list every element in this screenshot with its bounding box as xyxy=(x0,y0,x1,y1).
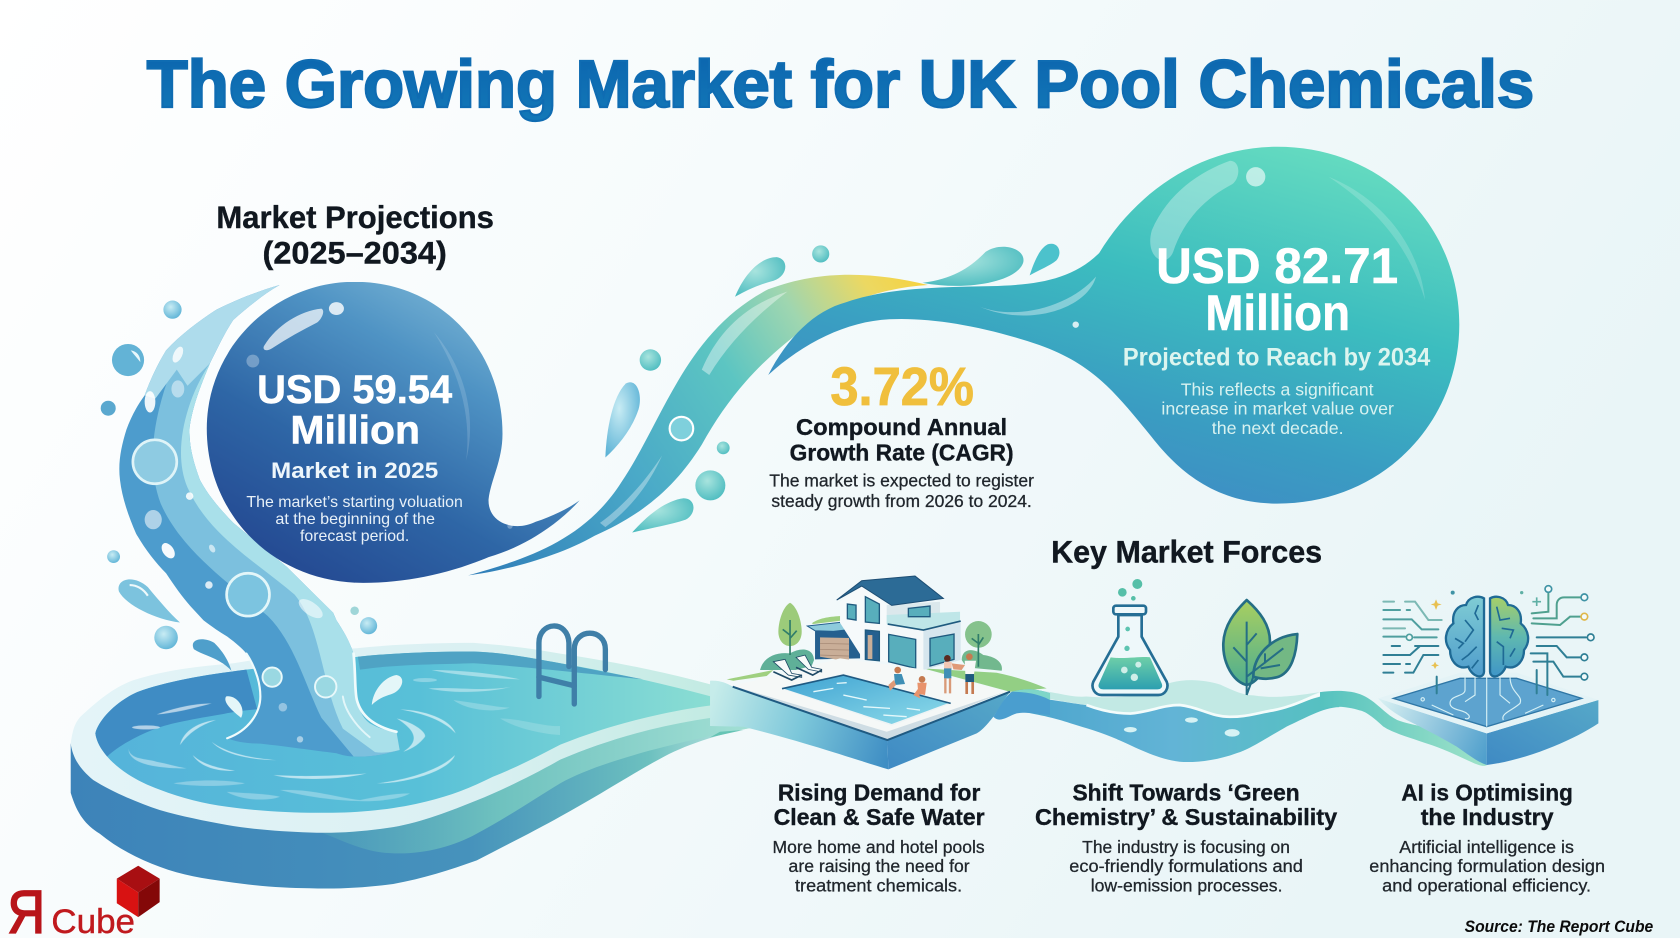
lawn xyxy=(923,668,1047,692)
heading: market projections xyxy=(216,200,494,271)
garage xyxy=(815,628,860,659)
force: rising demand: treatment chemicals. xyxy=(795,875,962,895)
trees xyxy=(778,603,992,667)
chip platform xyxy=(1378,698,1487,765)
logo: RCube: Я xyxy=(8,879,45,946)
text: USD 82.71 million: Projected to Reach by 2034 xyxy=(1123,344,1431,371)
text: USD 82.71 million: USD 82.71 xyxy=(1156,237,1398,294)
heading: market projections: (2025–2034) xyxy=(262,236,447,271)
water droplets: upper ribbon xyxy=(605,244,1059,533)
CAGR callout: The market is expected to register xyxy=(769,470,1034,490)
logo: RCube: Cube xyxy=(51,903,135,941)
force: green chemistry: eco-friendly formulations and xyxy=(1069,856,1303,876)
blue water layer xyxy=(1005,692,1339,762)
text: USD 59.54 million: Market in 2025 xyxy=(271,458,438,483)
pool inner wall, left xyxy=(95,670,257,756)
force: AI: enhancing formulation design xyxy=(1369,856,1605,876)
heading: key market forces: Key Market Forces xyxy=(1051,535,1322,570)
column top tip xyxy=(145,285,280,399)
force: rising demand xyxy=(772,779,985,895)
force: AI: Artificial intelligence is xyxy=(1399,837,1574,857)
force: AI: AI is Optimising xyxy=(1401,779,1573,805)
force: rising demand: More home and hotel pools xyxy=(772,837,985,857)
heading: market projections: Market Projections xyxy=(216,200,494,235)
bubble: USD 82.71 million xyxy=(768,147,1459,504)
column mid band xyxy=(153,363,400,757)
windows xyxy=(847,597,954,668)
water droplets: left side xyxy=(101,301,402,718)
column light band xyxy=(181,363,400,753)
force: green chemistry: Chemistry’ & Sustainability xyxy=(1035,804,1337,830)
balcony xyxy=(887,612,960,630)
force: green chemistry: low-emission processes. xyxy=(1091,875,1282,895)
pool water xyxy=(95,651,734,813)
text: USD 59.54 million: at the beginning of the xyxy=(275,510,435,528)
loungers xyxy=(773,655,822,677)
CAGR callout: Compound Annual xyxy=(796,414,1007,440)
highlights on column xyxy=(145,345,326,743)
CAGR callout: 3.72% xyxy=(830,358,974,417)
people xyxy=(888,653,976,698)
pool inner wall, right xyxy=(358,651,643,679)
text: USD 59.54 million: forecast period. xyxy=(300,527,409,545)
text: USD 59.54 million: The market’s starting voluation xyxy=(246,493,463,511)
bubble highlights xyxy=(246,302,513,529)
pool ladder xyxy=(539,626,605,704)
teal wall layer xyxy=(321,713,771,853)
CAGR callout xyxy=(769,358,1034,511)
text: USD 82.71 million: This reflects a significant xyxy=(1181,379,1374,399)
force: AI: and operational efficiency. xyxy=(1382,875,1591,895)
terrace side walls xyxy=(710,681,888,769)
force: AI: the Industry xyxy=(1421,804,1554,830)
force: AI xyxy=(1369,779,1605,895)
bushes xyxy=(760,649,814,670)
terrace xyxy=(732,658,1007,739)
pool rim xyxy=(71,643,761,833)
text: USD 59.54 million xyxy=(246,368,463,545)
text: USD 82.71 million: increase in market value over xyxy=(1161,399,1394,419)
force: rising demand: are raising the need for xyxy=(789,856,970,876)
CAGR callout: steady growth from 2026 to 2024. xyxy=(771,491,1032,511)
circuit lines right xyxy=(1437,593,1586,695)
foam edges xyxy=(227,654,396,738)
logo: RCube xyxy=(8,866,160,946)
water ripples xyxy=(128,670,560,801)
icon: villa with pool xyxy=(710,576,1050,769)
roof xyxy=(837,576,943,605)
force: green chemistry: The industry is focusing on xyxy=(1082,837,1290,857)
title: The Growing Market for UK Pool Chemicals xyxy=(147,48,1534,122)
force: rising demand: Rising Demand for xyxy=(778,779,980,805)
brain xyxy=(1446,597,1484,676)
text: USD 59.54 million: USD 59.54 xyxy=(257,368,452,412)
icon: leaves xyxy=(1223,600,1297,695)
circuit lines left xyxy=(1383,602,1442,673)
CAGR callout: Growth Rate (CAGR) xyxy=(790,440,1014,466)
water column xyxy=(119,285,400,757)
pool xyxy=(71,643,771,889)
text: USD 82.71 million xyxy=(1123,237,1431,438)
pool outer wall xyxy=(71,696,771,889)
light water layer xyxy=(1012,680,1320,717)
force: rising demand: Clean & Safe Water xyxy=(774,804,985,830)
text: USD 82.71 million: Million xyxy=(1205,284,1350,341)
source note: Source: The Report Cube xyxy=(1465,917,1653,936)
force: green chemistry: Shift Towards ‘Green xyxy=(1072,779,1300,805)
text: USD 82.71 million: the next decade. xyxy=(1212,418,1344,438)
bubble: USD 59.54 million xyxy=(207,282,580,583)
teal tail towards the chip xyxy=(1320,691,1487,766)
force: green chemistry xyxy=(1035,779,1337,895)
text: USD 59.54 million: Million xyxy=(290,409,420,453)
house walls xyxy=(840,587,887,662)
pool water xyxy=(780,673,952,726)
upper ribbon connecting the bubbles xyxy=(468,275,928,575)
icon: AI brain on chip xyxy=(1378,586,1598,765)
right wave link xyxy=(993,689,1050,720)
wave band through the forces xyxy=(1005,680,1487,766)
bubble highlights xyxy=(979,161,1425,328)
icon: flask xyxy=(1093,579,1167,695)
